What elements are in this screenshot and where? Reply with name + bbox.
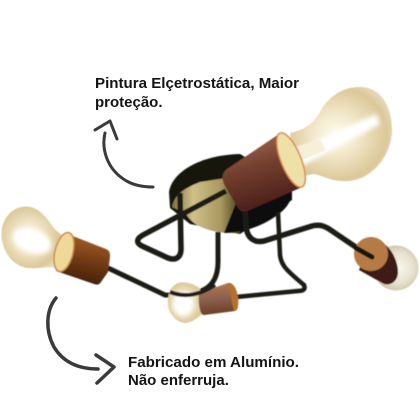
heading: electrostatic paint: proteção. bbox=[95, 94, 163, 111]
text: aluminium note bbox=[128, 354, 299, 389]
big socket bbox=[223, 133, 303, 212]
arm: front socket bbox=[236, 212, 305, 297]
lamp fixture bbox=[2, 87, 419, 323]
small front bulb bbox=[168, 282, 238, 323]
left bulb bbox=[2, 206, 110, 285]
heading: electrostatic paint bbox=[95, 75, 299, 111]
ceiling canopy bbox=[169, 154, 292, 234]
arm: right socket bbox=[245, 212, 372, 258]
arrow: toward aluminium text bbox=[48, 298, 114, 383]
right bulb and socket bbox=[348, 231, 418, 290]
left socket bbox=[56, 233, 110, 285]
text: aluminium note: Fabricado em Alumínio. bbox=[128, 354, 299, 371]
heading: electrostatic paint: Pintura Elçetrostática, Maior bbox=[95, 75, 299, 92]
arm: left triangle loop bbox=[138, 191, 226, 259]
text: aluminium note: Não enferruja. bbox=[128, 372, 229, 389]
big bulb bbox=[223, 87, 392, 212]
arrow: up to paint text bbox=[95, 121, 153, 187]
arm: left socket bbox=[108, 232, 218, 295]
small socket bbox=[199, 283, 238, 315]
